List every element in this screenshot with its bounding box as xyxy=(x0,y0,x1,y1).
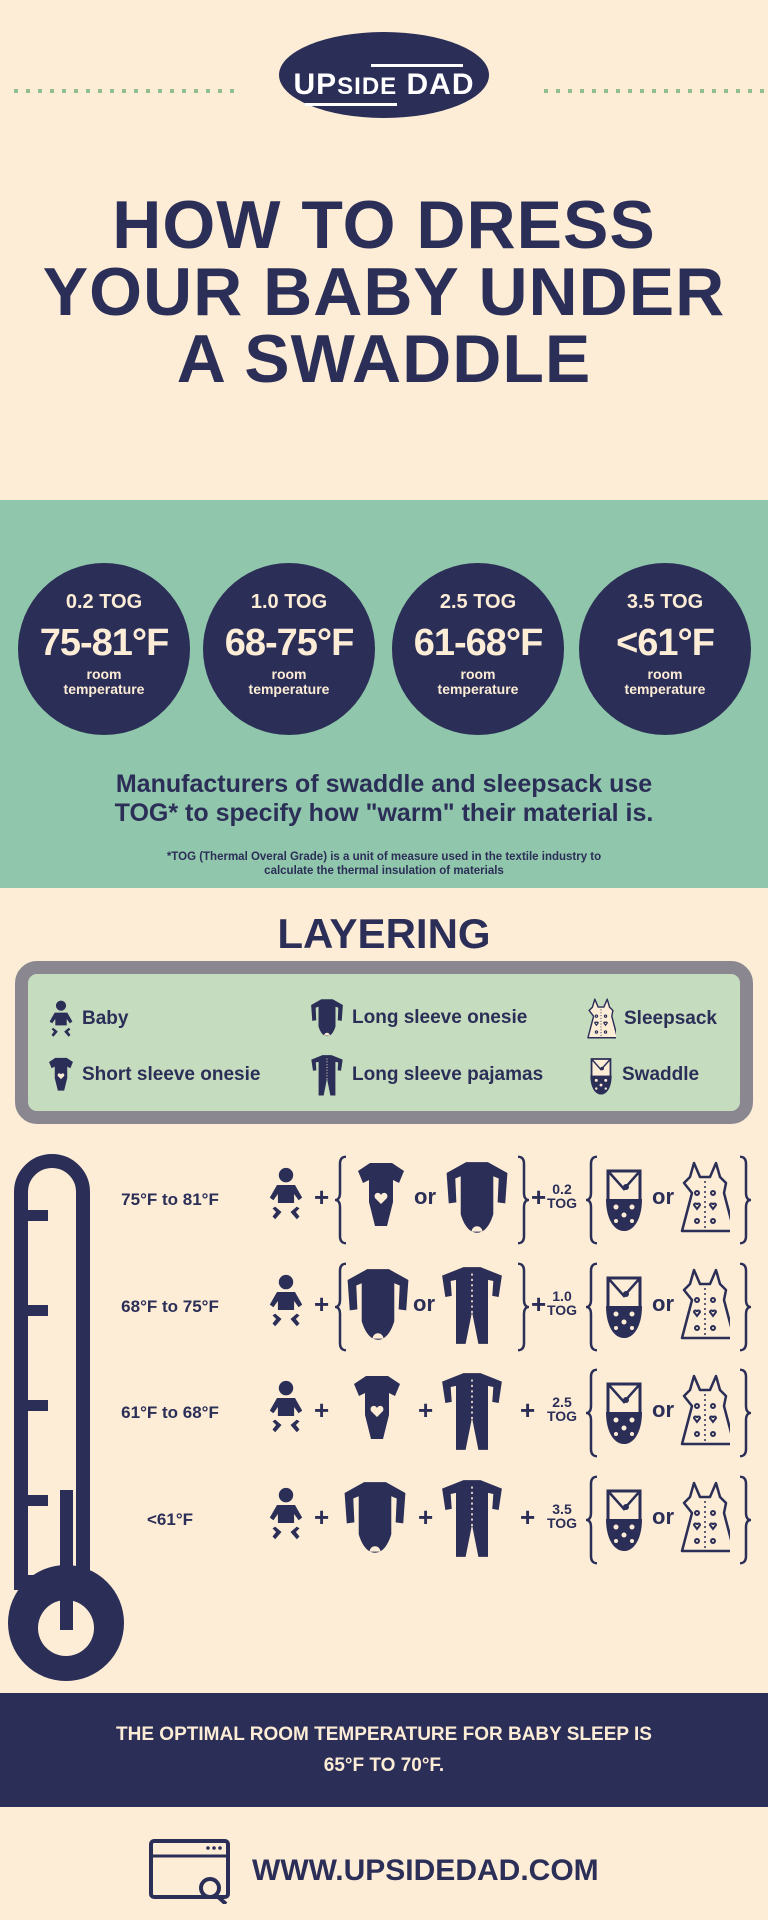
row 2: TOG xyxy=(547,1302,577,1318)
row 2: or xyxy=(413,1291,435,1316)
circle 0.2 xyxy=(18,563,190,735)
circle 3.5: room xyxy=(648,666,682,682)
legend: sleepsack xyxy=(587,998,717,1038)
banner: optimal temperature xyxy=(0,1693,768,1807)
row 4: + xyxy=(520,1502,535,1532)
legend: baby xyxy=(50,1000,128,1037)
row 1: 75°F to 81°F xyxy=(121,1190,219,1209)
circle 3.5: <61°F xyxy=(616,622,714,664)
banner: optimal temperature: THE OPTIMAL ROOM TEMPERATURE FOR BABY SLEEP IS xyxy=(116,1724,652,1745)
circle 2.5 xyxy=(392,563,564,735)
row 1: or xyxy=(652,1184,674,1209)
circle 3.5 xyxy=(579,563,751,735)
circle 3.5: 3.5 TOG xyxy=(627,591,703,613)
circle 0.2: temperature xyxy=(64,681,144,697)
row 3: 2.5 xyxy=(552,1394,572,1410)
logo: UPSIDE DAD xyxy=(293,68,475,101)
row 3: TOG xyxy=(547,1408,577,1424)
row 4: <61°F xyxy=(147,1510,193,1529)
circle 2.5: room xyxy=(460,666,496,682)
legend: pajamas: Long sleeve pajamas xyxy=(352,1064,543,1085)
legend: short sleeve: Short sleeve onesie xyxy=(82,1064,260,1085)
legend: long onesie xyxy=(311,999,527,1036)
row 4: 3.5 xyxy=(552,1501,572,1517)
row 4: + xyxy=(314,1502,329,1532)
legend: swaddle: Swaddle xyxy=(622,1064,699,1085)
circle 1.0: 1.0 TOG xyxy=(251,591,327,613)
circle 1.0: temperature xyxy=(249,681,329,697)
legend: short sleeve xyxy=(49,1058,260,1091)
logo header xyxy=(14,32,764,118)
footer: website: WWW.UPSIDEDAD.COM xyxy=(252,1854,599,1887)
row 2 xyxy=(121,1262,751,1352)
title xyxy=(43,187,725,397)
row 4: or xyxy=(652,1504,674,1529)
row 3 xyxy=(121,1368,751,1458)
circle 0.2: 0.2 TOG xyxy=(66,591,142,613)
footnote xyxy=(167,851,601,877)
circle 3.5: temperature xyxy=(625,681,705,697)
circle 1.0 xyxy=(203,563,375,735)
row 4 xyxy=(147,1476,751,1564)
panel: TOG xyxy=(0,500,768,888)
footer: website xyxy=(149,1839,599,1904)
icon: browser search xyxy=(149,1839,230,1904)
row 1: + xyxy=(314,1182,329,1212)
footnote: *TOG (Thermal Overal Grade) is a unit of measure used in the textile industry to xyxy=(167,851,601,863)
row 1 xyxy=(121,1156,751,1244)
legend: pajamas xyxy=(311,1055,543,1096)
legend: swaddle xyxy=(590,1058,699,1094)
row 2: + xyxy=(314,1289,329,1319)
row 3: + xyxy=(314,1395,329,1425)
TOG explanation: Manufacturers of swaddle and sleepsack use xyxy=(116,770,652,798)
legend: long onesie: Long sleeve onesie xyxy=(352,1007,527,1028)
title: HOW TO DRESS xyxy=(112,187,656,263)
circle 0.2: 75-81°F xyxy=(40,622,168,664)
logo xyxy=(279,32,489,118)
circle 0.2: room xyxy=(86,666,122,682)
row 3: 61°F to 68°F xyxy=(121,1403,219,1422)
footnote: calculate the thermal insulation of materials xyxy=(264,865,504,877)
row 1: TOG xyxy=(547,1195,577,1211)
row 3: + xyxy=(520,1395,535,1425)
row 2: 68°F to 75°F xyxy=(121,1297,219,1316)
circle 1.0: 68-75°F xyxy=(225,622,353,664)
circle 2.5: 61-68°F xyxy=(414,622,542,664)
TOG explanation xyxy=(114,770,653,827)
legend: sleepsack: Sleepsack xyxy=(624,1008,717,1029)
row 2: or xyxy=(652,1291,674,1316)
row 3: + xyxy=(418,1395,433,1425)
circle 2.5: 2.5 TOG xyxy=(440,591,516,613)
row 1: 0.2 xyxy=(552,1181,572,1197)
thermometer xyxy=(8,1154,124,1681)
row 2: + xyxy=(531,1289,546,1319)
banner: optimal temperature: 65°F TO 70°F. xyxy=(324,1755,444,1776)
row 1: or xyxy=(414,1184,436,1209)
circle 2.5: temperature xyxy=(438,681,518,697)
row 2: 1.0 xyxy=(552,1288,572,1304)
title: YOUR BABY UNDER xyxy=(43,254,725,330)
circle 1.0: room xyxy=(272,666,306,682)
row 4: TOG xyxy=(547,1515,577,1531)
legend box xyxy=(15,961,753,1124)
row 3: or xyxy=(652,1397,674,1422)
row 4: + xyxy=(418,1502,433,1532)
heading: layering: LAYERING xyxy=(277,910,491,957)
title: A SWADDLE xyxy=(177,321,591,397)
TOG explanation: TOG* to specify how "warm" their material is. xyxy=(115,799,653,827)
row 1: + xyxy=(531,1182,546,1212)
legend: baby: Baby xyxy=(82,1008,128,1029)
